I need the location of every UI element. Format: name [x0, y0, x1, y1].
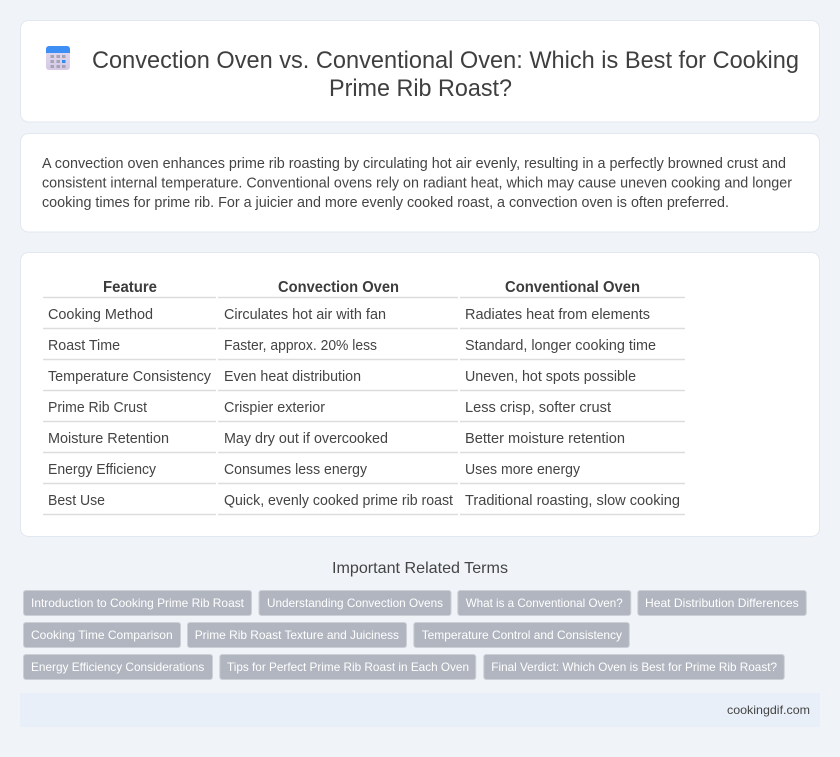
icon: calendar grid: [46, 46, 70, 70]
table row: prime rib crust: Prime Rib Crust: [48, 400, 147, 416]
table header: Convection Oven: [278, 279, 399, 296]
tag list: [24, 590, 806, 680]
tag: Tips for Perfect Prime Rib Roast in Each Oven: [227, 660, 469, 674]
table row: moisture retention: [48, 431, 625, 447]
panel: header: [20, 20, 820, 122]
text block: summary paragraph: [42, 156, 792, 211]
table row: energy efficiency: Consumes less energy: [224, 462, 368, 478]
tag: Prime Rib Roast Texture and Juiciness: [195, 628, 399, 642]
tag: Energy Efficiency Considerations: [31, 660, 204, 674]
table row: moisture retention: Better moisture retention: [465, 431, 625, 447]
table row: cooking method: Cooking Method: [48, 307, 153, 323]
tag: [484, 654, 784, 680]
panel: introduction text: [20, 134, 820, 232]
tag: Introduction to Cooking Prime Rib Roast: [31, 596, 245, 610]
table row: roast time: Faster, approx. 20% less: [224, 338, 377, 354]
table row: energy efficiency: [48, 462, 581, 478]
table row: temperature consistency: Uneven, hot spots possible: [465, 369, 636, 385]
title: [92, 47, 799, 102]
table header: [103, 279, 640, 296]
tag: [24, 622, 180, 648]
tag: [220, 654, 476, 680]
table header: Feature: [103, 279, 157, 296]
table row: temperature consistency: [48, 369, 636, 385]
table row: energy efficiency: Energy Efficiency: [48, 462, 157, 478]
table header: Conventional Oven: [505, 279, 640, 296]
footer: site name: cookingdif.com: [727, 703, 810, 717]
table row: roast time: Roast Time: [48, 338, 120, 354]
table row: cooking method: Radiates heat from elements: [465, 307, 650, 323]
table row: prime rib crust: Less crisp, softer crust: [465, 400, 611, 416]
tag: [638, 590, 806, 616]
table row: cooking method: [48, 307, 650, 323]
footer: [20, 693, 820, 727]
table row: roast time: [48, 338, 656, 354]
tag: Final Verdict: Which Oven is Best for Prime Rib Roast?: [491, 660, 777, 674]
table row: prime rib crust: Crispier exterior: [224, 400, 325, 416]
tag: Temperature Control and Consistency: [422, 628, 622, 642]
table row: best use: Traditional roasting, slow cooking: [465, 493, 680, 509]
table row: cooking method: Circulates hot air with fan: [224, 307, 386, 323]
table row: moisture retention: Moisture Retention: [48, 431, 169, 447]
text block: summary paragraph: consistent internal temperature. Conventional ovens rely on radiant heat, which may cause uneven cooking and longer: [42, 176, 792, 192]
table row: best use: Best Use: [48, 493, 105, 509]
tag: [458, 590, 631, 616]
tag: Cooking Time Comparison: [31, 628, 173, 642]
tag: Understanding Convection Ovens: [267, 596, 443, 610]
table row: energy efficiency: Uses more energy: [465, 462, 581, 478]
table row: temperature consistency: Even heat distribution: [224, 369, 361, 385]
tag: [24, 590, 252, 616]
text block: summary paragraph: A convection oven enhances prime rib roasting by circulating hot air evenly, resulting in a perfectly browned crust and: [42, 156, 786, 172]
tag: [188, 622, 406, 648]
tag: [24, 654, 212, 680]
table row: moisture retention: May dry out if overcooked: [224, 431, 388, 447]
panel: comparison table: [20, 252, 820, 536]
title: Convection Oven vs. Conventional Oven: Which is Best for Cooking: [92, 47, 799, 74]
table row: temperature consistency: Temperature Consistency: [48, 369, 212, 385]
table row: best use: Quick, evenly cooked prime rib roast: [224, 493, 453, 509]
tag: What is a Conventional Oven?: [466, 596, 623, 610]
heading: important related terms: Important Related Terms: [332, 560, 508, 577]
tag: [414, 622, 629, 648]
text block: summary paragraph: cooking times for prime rib. For a juicier and more evenly cooked roast, a convection oven is often preferred.: [42, 195, 729, 211]
table row: prime rib crust: [48, 400, 611, 416]
table row: roast time: Standard, longer cooking time: [465, 338, 656, 354]
tag: Heat Distribution Differences: [645, 596, 799, 610]
tag: [259, 590, 451, 616]
title: Prime Rib Roast?: [329, 75, 512, 102]
table row: best use: [48, 493, 680, 509]
